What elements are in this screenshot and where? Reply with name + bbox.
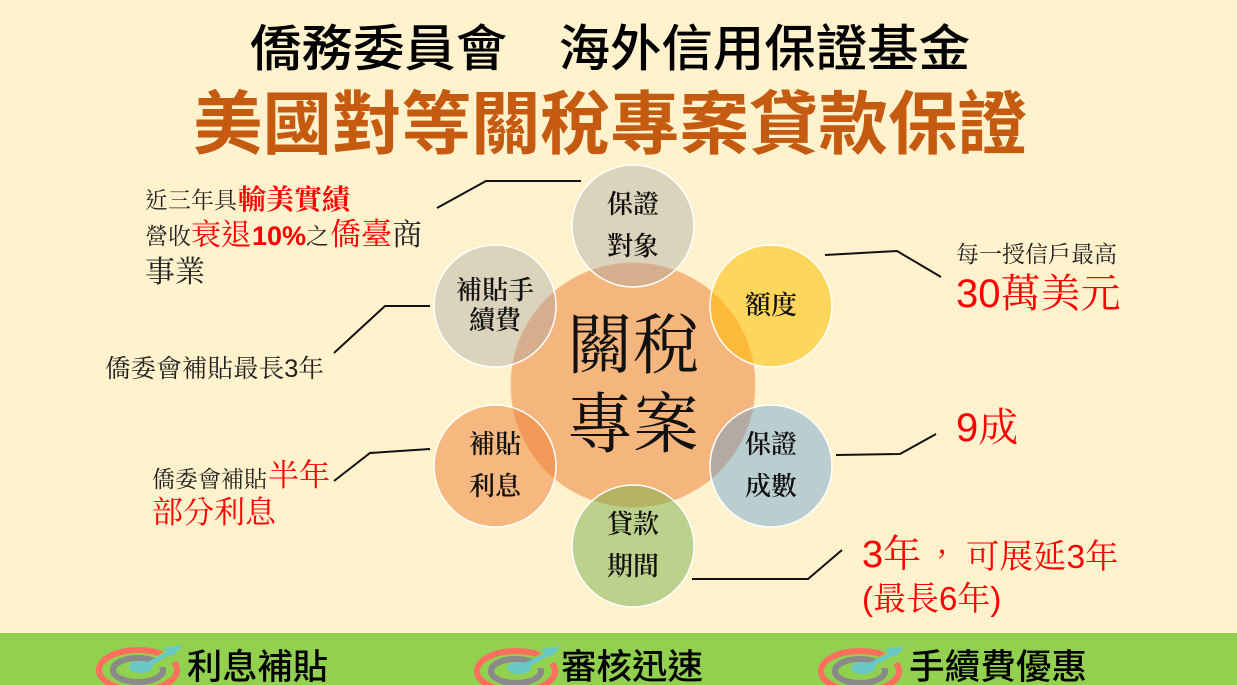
leader line: fee subsidy [334, 306, 430, 353]
label: amount: 額度 [745, 290, 797, 320]
circle: guarantee ratio [710, 405, 832, 527]
circle: loan term [572, 485, 694, 607]
text: eligibility: 營收 [145, 223, 191, 249]
text: loan term detail: (最長6年) [862, 580, 1001, 617]
text: loan term detail: ， [926, 538, 958, 574]
text: eligibility: 僑臺 [330, 217, 392, 252]
leader line: amount [825, 251, 941, 277]
text: eligibility: 商 [392, 219, 422, 252]
title: programme name: 美國對等關稅專案貸款保證 [193, 86, 1027, 163]
label: fee subsidy: 補貼手 [456, 275, 534, 305]
label: interest subsidy: 補貼 [469, 429, 521, 459]
text: interest subsidy detail: 部分利息 [152, 495, 277, 530]
text: eligibility: 衰退 [191, 219, 251, 252]
text: interest subsidy detail: 僑委會補貼 [152, 466, 267, 492]
text: eligibility: 10% [252, 221, 306, 251]
label: loan term: 期間 [607, 551, 659, 581]
circle: amount [710, 245, 832, 367]
text: guarantee ratio detail: 9成 [956, 406, 1018, 450]
icon: target 3 [821, 644, 913, 685]
text: eligibility: 事業 [145, 256, 206, 289]
label: centre: 關稅 [567, 308, 700, 382]
icon: target 2 [477, 644, 569, 685]
text: eligibility: 近三年具 [145, 187, 238, 213]
title: organisation and fund: 僑務委員會 海外信用保證基金 [250, 21, 970, 77]
text: amount detail: 30萬美元 [956, 272, 1120, 316]
diagram: circle cluster [434, 165, 832, 607]
label: guarantee ratio: 保證 [745, 429, 797, 459]
text: eligibility: 輸美實績 [238, 184, 354, 215]
circle: interest subsidy [434, 405, 556, 527]
label: guarantee target: 對象 [607, 231, 659, 261]
circle: guarantee target [572, 165, 694, 287]
label: fee subsidy: 續費 [469, 305, 523, 335]
label: guarantee ratio: 成數 [745, 471, 797, 501]
text: fee subsidy detail: 僑委會補貼最長3年 [105, 355, 324, 383]
circle: fee subsidy [434, 245, 556, 367]
icon: target 1 [99, 643, 191, 685]
circle: centre [511, 263, 755, 507]
label: interest subsidy: 利息 [469, 471, 522, 501]
text: eligibility: 之 [306, 223, 329, 249]
label: guarantee target: 保證 [607, 189, 659, 219]
leader line: loan term [692, 550, 842, 579]
leader line: guarantee ratio [836, 434, 936, 455]
text: interest subsidy detail: 半年 [268, 458, 330, 493]
label: loan term: 貸款 [607, 509, 659, 539]
text: amount detail: 每一授信戶最高 [956, 241, 1117, 267]
text: loan term detail: 可展延3年 [966, 539, 1119, 576]
footer band [0, 633, 1237, 685]
text: loan term detail: 3年 [862, 534, 921, 576]
label: centre: 專案 [567, 387, 699, 461]
leader line: interest subsidy [334, 449, 430, 481]
leader line: guarantee target [437, 181, 581, 208]
